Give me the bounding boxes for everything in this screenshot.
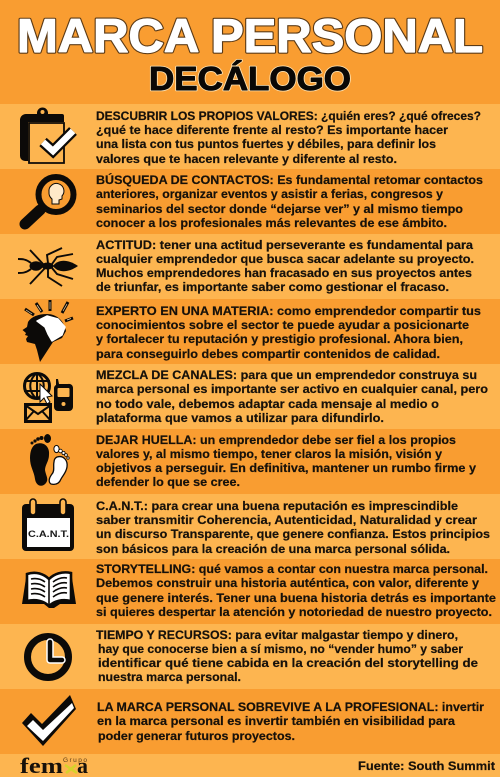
text: descubrir — [96, 109, 481, 166]
panel: experto en una materia — [0, 299, 500, 364]
text: storytelling: Debemos construir una historia auténtica, con valor, diferente y — [96, 576, 479, 590]
text: dejar huella: valores y, al mismo tiempo, tener claros la misión, visión y — [96, 447, 442, 461]
icon: open book — [22, 572, 76, 608]
icon: magnifier with head — [25, 177, 74, 224]
text: experto: y fortalecer tu reputación y prestigio profesional. Ahora bien, — [96, 332, 463, 346]
text: cant: un discurso Transparente, que genere confianza. Estos principios — [96, 527, 490, 541]
text: búsqueda: anteriores, organizar eventos y asistir a ferias, congresos y — [96, 187, 443, 201]
text: cant — [96, 499, 490, 556]
text: dejar huella: defender lo que se cree. — [96, 475, 240, 489]
text: descubrir: DESCUBRIR LOS PROPIOS VALORES: ¿quién eres? ¿qué ofreces? — [96, 109, 481, 123]
text: tiempo: TIEMPO Y RECURSOS: para evitar malgastar tiempo y dinero, — [96, 628, 458, 642]
text: sobrevive — [97, 700, 484, 743]
text: tiempo: hay que conocerse bien a sí mismo, no “vender humo” y saber — [98, 642, 463, 656]
text: descubrir: ¿qué te hace diferente frente al resto? Es importante hacer — [96, 123, 448, 137]
icon: check mark — [22, 695, 76, 746]
icon: clock — [28, 636, 68, 678]
logo: femxa: Grupo — [63, 757, 87, 764]
text: actitud: ACTITUD: tener una actitud perseverante es fundamental para — [96, 238, 473, 252]
text: experto: conocimientos sobre el sector te puede ayudar a posicionarte — [96, 318, 469, 332]
text: storytelling: si quieres despertar la atención y notoriedad de nuestro proyecto. — [96, 605, 492, 619]
text: descubrir: una lista con tus puntos fuertes y débiles, para definir los — [96, 137, 436, 151]
icon: globe, phone and envelope — [24, 373, 73, 422]
icon: calendar: C.A.N.T. — [28, 529, 69, 539]
text: sobrevive: LA MARCA PERSONAL SOBREVIVE A LA PROFESIONAL: invertir — [97, 700, 484, 714]
text: actitud: Muchos emprendedores han fracasado en sus proyectos antes — [96, 266, 472, 280]
text: búsqueda — [96, 172, 483, 230]
text: actitud: de triunfar, es importante saber como gestionar el fracaso. — [96, 280, 449, 294]
text: dejar huella: objetivos a perseguir. En definitiva, mantener un rumbo firme y — [96, 461, 476, 475]
icon: head with rays — [22, 300, 73, 362]
subtitle: DECÁLOGO — [149, 60, 351, 97]
footer band — [0, 753, 500, 777]
subtitle: DECÁLOGO — [149, 60, 351, 97]
source credit: Fuente: South Summit — [358, 759, 495, 773]
text: storytelling: STORYTELLING: qué vamos a contar con nuestra marca personal. — [96, 562, 488, 576]
panel: actitud — [0, 234, 500, 299]
text: mezcla: marca personal es importante ser activo en cualquier canal, pero — [96, 382, 488, 396]
text: sobrevive: en la marca personal es invertir también en visibilidad para — [97, 714, 455, 728]
text: actitud — [96, 238, 474, 294]
panel: la marca personal sobrevive — [0, 689, 500, 754]
text: dejar huella: DEJAR HUELLA: un emprendedor debe ser fiel a los propios — [96, 433, 456, 447]
text: experto: EXPERTO EN UNA MATERIA: como emprendedor compartir tus — [96, 304, 481, 318]
text: sobrevive: poder generar futuros proyectos. — [98, 729, 295, 743]
text: búsqueda: seminarios del sector donde “dejarse ver” y al mismo tiempo — [96, 202, 463, 216]
text: búsqueda: BÚSQUEDA DE CONTACTOS: Es fundamental retomar contactos — [96, 172, 483, 187]
panel: C.A.N.T. — [0, 494, 500, 559]
title: MARCA PERSONAL — [17, 9, 483, 62]
logo: femxa — [20, 753, 88, 777]
text: descubrir: valores que te hacen relevante y diferente al resto. — [96, 152, 397, 166]
icon: footprints — [30, 434, 69, 486]
text: mezcla — [96, 368, 488, 425]
text: cant: C.A.N.T.: para crear una buena reputación es imprescindible — [96, 499, 458, 513]
panel: storytelling — [0, 559, 500, 624]
text: dejar huella — [96, 433, 476, 489]
text: mezcla: no todo vale, debemos adaptar cada mensaje al medio o — [96, 397, 439, 411]
text: actitud: cualquier emprendedor que busca sacar adelante su proyecto. — [96, 252, 474, 266]
icon: clipboard with check — [20, 108, 73, 163]
text: tiempo: nuestra marca personal. — [98, 670, 241, 684]
panel: tiempo y recursos — [0, 624, 500, 689]
text: experto: para conseguirlo debes compartir contenidos de calidad. — [96, 347, 440, 361]
text: búsqueda: conocer a los profesionales más relevantes de ese ámbito. — [96, 216, 447, 230]
panel: dejar huella — [0, 429, 500, 494]
title: MARCA PERSONAL — [17, 9, 483, 62]
text: cant: son básicos para la creación de una marca personal sólida. — [96, 542, 450, 556]
text: mezcla: plataforma que vamos a utilizar para difundirlo. — [96, 411, 384, 425]
text: tiempo — [96, 628, 478, 684]
icon: calendar — [22, 499, 74, 551]
text: experto — [96, 304, 481, 361]
text: storytelling: que genere interés. Tener una buena historia detrás es importante — [96, 591, 496, 605]
text: tiempo: identificar qué tiene cabida en la creación del storytelling de — [98, 656, 478, 670]
icon: ant — [18, 248, 78, 286]
panel: descubrir los propios valores — [0, 104, 500, 169]
text: storytelling — [96, 562, 496, 619]
panel: búsqueda de contactos — [0, 169, 500, 234]
text: cant: saber transmitir Coherencia, Autenticidad, Naturalidad y crear — [96, 513, 477, 527]
text: mezcla: MEZCLA DE CANALES: para que un emprendedor construya su — [96, 368, 477, 382]
panel: mezcla de canales — [0, 364, 500, 429]
